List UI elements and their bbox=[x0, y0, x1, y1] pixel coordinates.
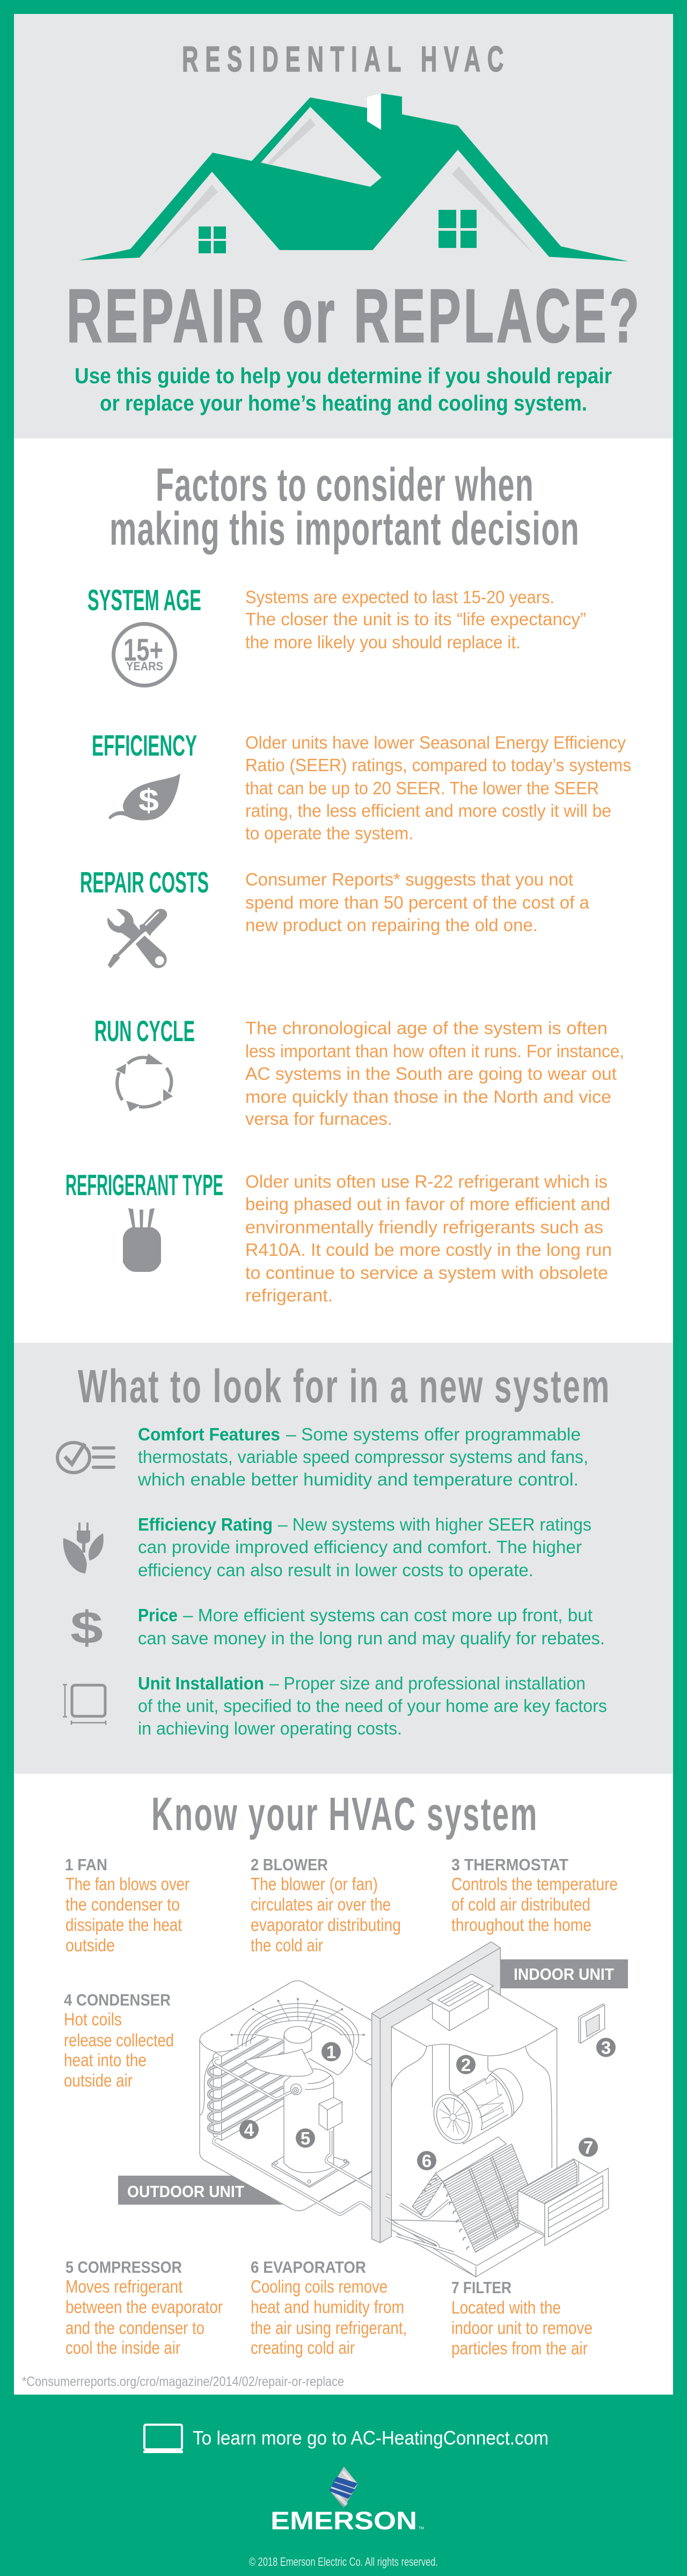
part: blower: evaporator distributing bbox=[251, 1915, 401, 1935]
number markers: 7 bbox=[583, 2138, 593, 2157]
part: blower: the cold air bbox=[251, 1935, 323, 1955]
text: system age: The closer the unit is to its “life expectancy” bbox=[245, 609, 586, 629]
number markers: 2 bbox=[461, 2055, 471, 2075]
text: system age: the more likely you should replace it. bbox=[245, 632, 521, 652]
factor: run cycle: RUN CYCLE bbox=[94, 1014, 195, 1048]
icon: unit size bbox=[63, 1685, 106, 1725]
icon: evaporator coil bbox=[412, 2137, 528, 2252]
feature: efficiency rating bbox=[63, 1514, 591, 1580]
logo: Emerson: EMERSON bbox=[271, 2506, 417, 2535]
part: filter bbox=[451, 2278, 593, 2358]
factor: system age: SYSTEM AGE bbox=[87, 583, 201, 617]
label: outdoor unit: OUTDOOR UNIT bbox=[127, 2182, 244, 2201]
heading: factors bbox=[109, 459, 580, 555]
icon: house roof bbox=[79, 93, 628, 261]
intro text bbox=[75, 363, 612, 415]
part: condenser: heat into the bbox=[64, 2050, 147, 2070]
part: evaporator bbox=[251, 2258, 407, 2358]
text: efficiency: to operate the system. bbox=[245, 823, 413, 843]
part: condenser: outside air bbox=[64, 2070, 133, 2090]
label: indoor unit bbox=[500, 1959, 628, 1988]
icon: blower bbox=[427, 2068, 523, 2149]
part: fan: The fan blows over bbox=[65, 1874, 189, 1894]
text: system age: Systems are expected to last 15-20 years. bbox=[245, 587, 554, 607]
icon: leaf with dollar bbox=[108, 773, 180, 821]
text: efficiency rating: efficiency can also result in lower costs to operate. bbox=[138, 1560, 533, 1580]
icon: filter bbox=[518, 2159, 609, 2245]
icon: leaf with dollar: $ bbox=[138, 783, 159, 818]
part: compressor: between the evaporator bbox=[65, 2297, 223, 2317]
part: thermostat: 3 THERMOSTAT bbox=[451, 1855, 568, 1874]
text: unit installation bbox=[138, 1673, 607, 1738]
part: filter: particles from the air bbox=[451, 2338, 588, 2358]
part: thermostat: throughout the home bbox=[451, 1915, 591, 1935]
factor: refrigerant type: REFRIGERANT TYPE bbox=[65, 1168, 223, 1202]
part: condenser: release collected bbox=[64, 2030, 174, 2050]
text: efficiency rating bbox=[138, 1514, 591, 1580]
panel: footer bbox=[143, 2425, 549, 2568]
part: blower: circulates air over the bbox=[251, 1894, 391, 1914]
text: run cycle: AC systems in the South are going to wear out bbox=[245, 1064, 617, 1084]
icon: dollar sign: $ bbox=[70, 1602, 103, 1653]
panel: new system bbox=[14, 1343, 673, 1774]
panel: header bbox=[14, 14, 673, 438]
icon: drain pan bbox=[392, 2220, 545, 2277]
factor: run cycle bbox=[94, 1014, 624, 1129]
text: price: can save money in the long run and may qualify for rebates. bbox=[138, 1628, 605, 1648]
intro text: or replace your home’s heating and cooling system. bbox=[100, 391, 587, 415]
text: unit installation: Unit Installation bbox=[138, 1673, 264, 1693]
text: unit installation: of the unit, specified to the need of your home are key factors bbox=[138, 1696, 607, 1716]
number markers: 1 bbox=[326, 2042, 336, 2062]
part: compressor: 5 COMPRESSOR bbox=[65, 2258, 182, 2277]
factor: repair costs bbox=[80, 866, 590, 968]
part: evaporator: creating cold air bbox=[251, 2338, 355, 2358]
text: comfort bbox=[137, 1424, 588, 1489]
text: refrigerant type: refrigerant. bbox=[245, 1285, 333, 1305]
panel: factors bbox=[14, 438, 673, 1343]
text: comfort: Comfort Features bbox=[138, 1424, 280, 1444]
diagram: HVAC system bbox=[118, 1942, 628, 2277]
intro text: Use this guide to help you determine if you should repair bbox=[75, 363, 612, 388]
part: blower: The blower (or fan) bbox=[251, 1874, 378, 1894]
part: fan bbox=[65, 1855, 189, 1955]
icon: 15+ years: 15+ bbox=[123, 633, 163, 668]
icon: 15+ years bbox=[114, 624, 175, 686]
part: blower bbox=[251, 1855, 401, 1955]
text: system age bbox=[245, 587, 586, 652]
text: comfort: – Some systems offer programmable bbox=[286, 1424, 581, 1444]
icon: supply vent bbox=[427, 1974, 493, 2031]
feature: comfort bbox=[57, 1424, 588, 1489]
text: efficiency rating: – New systems with higher SEER ratings bbox=[278, 1514, 591, 1534]
text: price bbox=[138, 1605, 605, 1648]
number markers bbox=[239, 2038, 616, 2171]
part: fan: dissipate the heat bbox=[65, 1915, 182, 1935]
text: run cycle bbox=[245, 1018, 624, 1129]
call to action: To learn more go to AC-HeatingConnect.com bbox=[193, 2427, 549, 2449]
text: refrigerant type: Older units often use R-22 refrigerant which is bbox=[245, 1172, 608, 1191]
part: compressor: cool the inside air bbox=[65, 2338, 180, 2358]
text: repair costs: Consumer Reports* suggests that you not bbox=[245, 869, 573, 889]
part: evaporator: heat and humidity from bbox=[251, 2297, 404, 2317]
part: compressor: and the condenser to bbox=[65, 2318, 204, 2338]
part: evaporator: the air using refrigerant, bbox=[251, 2318, 407, 2338]
icon: plug and leaves bbox=[63, 1523, 104, 1574]
text: unit installation: – Proper size and professional installation bbox=[269, 1673, 586, 1693]
panel: know your HVAC bbox=[14, 1774, 673, 2395]
text: efficiency: that can be up to 20 SEER. The lower the SEER bbox=[245, 778, 599, 798]
icon: cycle arrows bbox=[115, 1053, 173, 1111]
icon: laptop bbox=[143, 2425, 183, 2453]
text: repair costs bbox=[245, 869, 590, 935]
number markers: 5 bbox=[301, 2128, 310, 2148]
text: refrigerant type: R410A. It could be more costly in the long run bbox=[245, 1240, 612, 1260]
part: thermostat: Controls the temperature bbox=[451, 1874, 618, 1894]
part: thermostat bbox=[451, 1855, 618, 1935]
indoor unit: wall and furnace bbox=[372, 1942, 605, 2243]
part: fan: 1 FAN bbox=[65, 1855, 107, 1874]
text: efficiency rating: can provide improved efficiency and comfort. The higher bbox=[138, 1537, 582, 1557]
eyebrow title: RESIDENTIAL HVAC bbox=[182, 39, 510, 79]
part: condenser bbox=[64, 1990, 174, 2090]
text: efficiency rating: Efficiency Rating bbox=[138, 1514, 273, 1534]
number markers: 3 bbox=[601, 2038, 611, 2058]
text: run cycle: The chronological age of the system is often bbox=[245, 1018, 608, 1038]
factor: system age bbox=[87, 583, 586, 686]
text: efficiency bbox=[245, 733, 631, 843]
label: outdoor unit bbox=[118, 2176, 283, 2205]
part: fan: the condenser to bbox=[65, 1894, 180, 1914]
part: evaporator: Cooling coils remove bbox=[251, 2277, 388, 2296]
number markers: 4 bbox=[244, 2120, 254, 2140]
part: filter: 7 FILTER bbox=[451, 2278, 511, 2297]
text: efficiency: Ratio (SEER) ratings, compared to today’s systems bbox=[245, 755, 631, 775]
part: blower: 2 BLOWER bbox=[251, 1855, 328, 1874]
text: run cycle: versa for furnaces. bbox=[245, 1109, 392, 1129]
text: refrigerant type bbox=[245, 1172, 612, 1305]
text: comfort: thermostats, variable speed compressor systems and fans, bbox=[138, 1447, 588, 1467]
part: fan: outside bbox=[65, 1935, 115, 1955]
feature: price bbox=[70, 1602, 605, 1653]
part: condenser: 4 CONDENSER bbox=[64, 1990, 171, 2009]
part: evaporator: 6 EVAPORATOR bbox=[251, 2258, 366, 2277]
feature: unit installation bbox=[63, 1673, 607, 1738]
number markers: 6 bbox=[422, 2151, 432, 2171]
factor: repair costs: REPAIR COSTS bbox=[80, 866, 209, 899]
part: filter: indoor unit to remove bbox=[451, 2318, 593, 2338]
text: unit installation: in achieving lower operating costs. bbox=[138, 1718, 402, 1738]
part: filter: Located with the bbox=[451, 2297, 561, 2317]
label: indoor unit: INDOOR UNIT bbox=[514, 1965, 614, 1984]
part: condenser: Hot coils bbox=[64, 2009, 122, 2029]
footnote: *Consumerreports.org/cro/magazine/2014/02/repair-or-replace bbox=[22, 2374, 344, 2389]
icon: refrigerant tank bbox=[123, 1208, 161, 1272]
text: comfort: which enable better humidity and temperature control. bbox=[137, 1469, 579, 1489]
text: refrigerant type: being phased out in favor of more efficient and bbox=[245, 1194, 610, 1214]
logo: Emerson bbox=[271, 2467, 424, 2535]
text: repair costs: new product on repairing the old one. bbox=[245, 915, 538, 935]
text: refrigerant type: environmentally friendly refrigerants such as bbox=[245, 1217, 603, 1237]
icon: checklist bbox=[57, 1443, 114, 1473]
factor: refrigerant type bbox=[65, 1168, 612, 1305]
text: efficiency: rating, the less efficient and more costly it will be bbox=[245, 801, 611, 821]
text: price: – More efficient systems can cost more up front, but bbox=[183, 1605, 593, 1625]
icon: wrench and screwdriver bbox=[107, 909, 167, 968]
text: repair costs: spend more than 50 percent of the cost of a bbox=[245, 892, 590, 912]
part: thermostat: of cold air distributed bbox=[451, 1894, 590, 1914]
indoor unit: evaporator coil and filter bbox=[392, 2137, 609, 2277]
icon: 15+ years: YEARS bbox=[126, 660, 163, 673]
factor: efficiency bbox=[92, 729, 631, 843]
text: refrigerant type: to continue to service a system with obsolete bbox=[245, 1263, 608, 1283]
text: run cycle: less important than how often it runs. For instance, bbox=[245, 1041, 624, 1061]
refrigerant pipes bbox=[386, 2195, 454, 2253]
outdoor unit bbox=[200, 1981, 372, 2214]
copyright: © 2018 Emerson Electric Co. All rights reserved. bbox=[249, 2555, 438, 2568]
icon: thermostat bbox=[579, 2004, 605, 2043]
text: price: Price bbox=[138, 1605, 178, 1625]
text: efficiency: Older units have lower Seasonal Energy Efficiency bbox=[245, 733, 626, 752]
factor: efficiency: EFFICIENCY bbox=[92, 729, 197, 762]
part: compressor: Moves refrigerant bbox=[65, 2277, 182, 2296]
text: run cycle: more quickly than those in the North and vice bbox=[245, 1087, 611, 1107]
part: compressor bbox=[65, 2258, 223, 2358]
logo: Emerson: TM bbox=[419, 2527, 424, 2530]
